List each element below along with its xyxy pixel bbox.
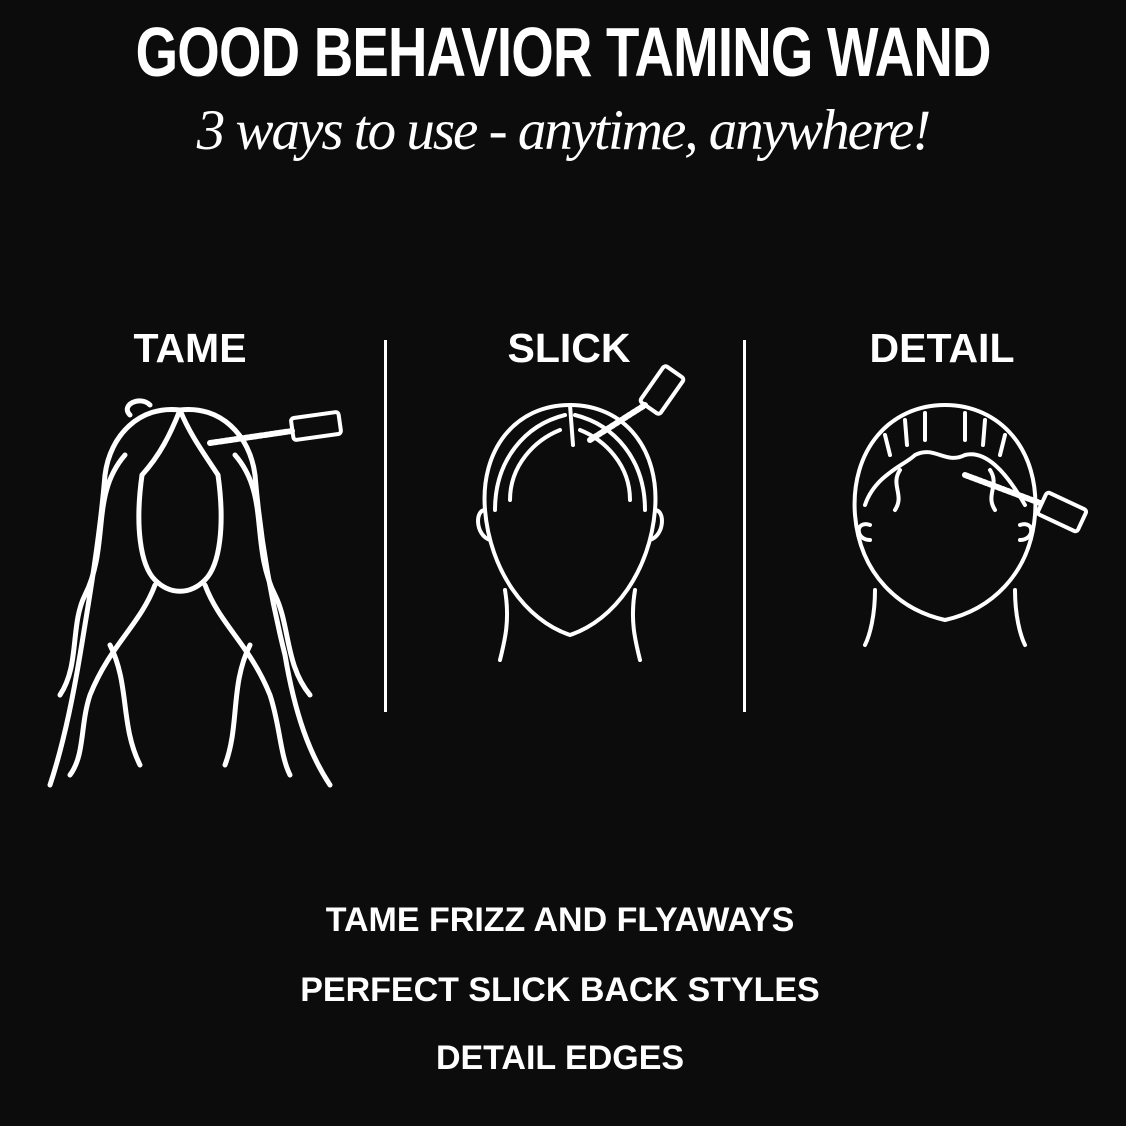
illustration: slick (476, 364, 686, 662)
label: detail: DETAIL (869, 325, 1014, 371)
subtitle: 3 ways to use - anytime, anywhere! (197, 99, 929, 162)
illustration: detail (852, 403, 1088, 648)
wand (291, 412, 341, 440)
label: slick: SLICK (508, 325, 630, 371)
wand (1037, 492, 1087, 532)
benefit line 1: TAME FRIZZ AND FLYAWAYS (326, 901, 794, 939)
benefit line 2: PERFECT SLICK BACK STYLES (300, 971, 820, 1009)
benefit line 3: DETAIL EDGES (436, 1039, 684, 1077)
divider left (384, 340, 387, 712)
wand (640, 365, 684, 415)
illustration: tame (long wavy hair) (48, 398, 343, 788)
label: tame: TAME (133, 325, 247, 371)
divider right (743, 340, 746, 712)
title: GOOD BEHAVIOR TAMING WAND (135, 13, 991, 91)
